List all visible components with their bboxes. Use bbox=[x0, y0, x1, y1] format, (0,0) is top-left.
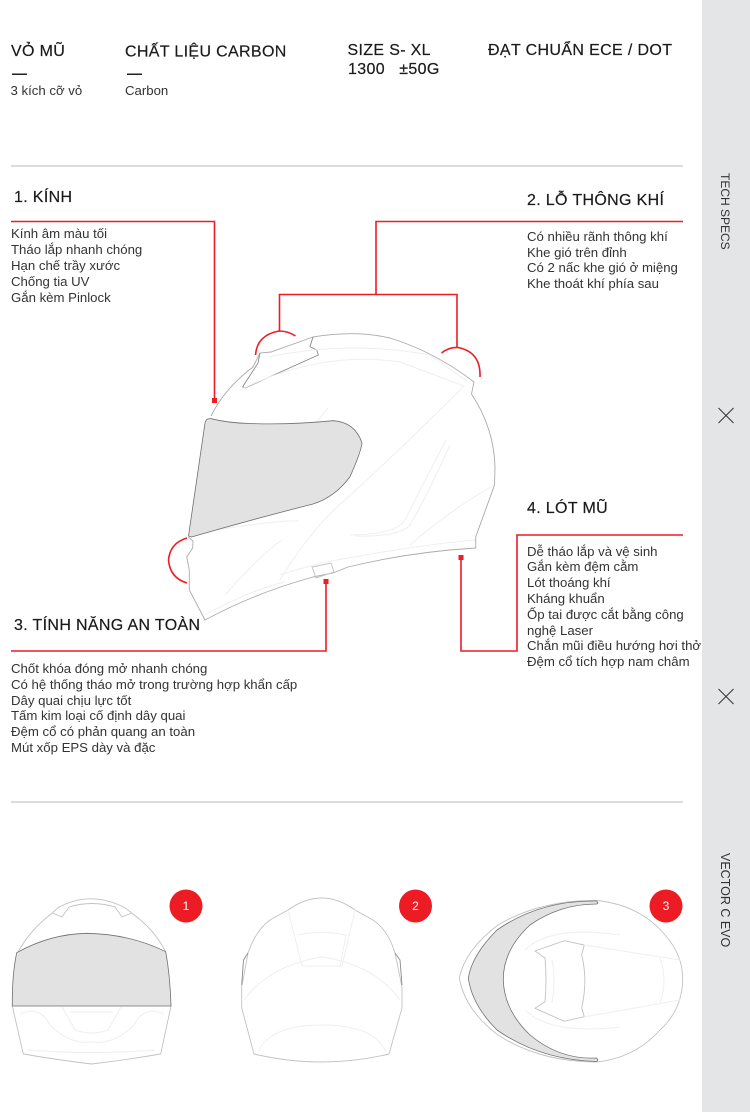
text: safety features: Có hệ thống tháo mở trong trường hợp khẩn cấp bbox=[11, 677, 297, 692]
main helmet side view bbox=[187, 334, 495, 620]
callout 4 line bbox=[458, 535, 683, 651]
text: liner features: Chắn mũi điều hướng hơi thở bbox=[527, 638, 701, 653]
sidebar bbox=[702, 0, 750, 1112]
text: liner features: Đệm cổ tích hợp nam châm bbox=[527, 654, 690, 669]
text: visor features: Chống tia UV bbox=[11, 274, 90, 289]
spec: size and weight: SIZE S- XL bbox=[348, 42, 431, 59]
spec: shell bbox=[10, 40, 82, 98]
icon: close cross lower bbox=[718, 689, 734, 704]
divider bottom bbox=[11, 801, 683, 803]
callout 2 lines bbox=[256, 222, 683, 377]
spec: carbon material bbox=[125, 42, 287, 98]
text: visor features: Kính âm màu tối bbox=[11, 226, 107, 241]
text: vent features: Khe gió trên đỉnh bbox=[527, 245, 627, 260]
helmet front view bbox=[12, 899, 171, 1064]
text: visor features bbox=[11, 226, 142, 305]
heading: 3 safety: 3. TÍNH NĂNG AN TOÀN bbox=[14, 615, 200, 634]
text: liner features: Lót thoáng khí bbox=[527, 575, 611, 590]
callout 3 line bbox=[11, 579, 328, 651]
spec: carbon material: Carbon bbox=[125, 83, 168, 98]
text: vent features: Khe thoát khí phía sau bbox=[527, 276, 659, 291]
top vent bbox=[243, 337, 318, 388]
badge 1: 1 bbox=[183, 899, 190, 913]
badge 2 bbox=[399, 890, 432, 922]
text: safety features: Tấm kim loại cố định dây quai bbox=[11, 708, 186, 723]
top view visor bbox=[468, 901, 598, 1062]
spec: shell: VỎ MŨ bbox=[11, 40, 65, 60]
text: vent features bbox=[527, 229, 678, 291]
heading: 2 vents: 2. LỖ THÔNG KHÍ bbox=[527, 190, 664, 209]
sidebar label: model name: VECTOR C EVO bbox=[718, 853, 732, 948]
visor bbox=[188, 419, 362, 537]
text: safety features: Mút xốp EPS dày và đặc bbox=[11, 740, 156, 755]
spec: shell: 3 kích cỡ vỏ bbox=[10, 83, 82, 98]
spec: carbon material: CHẤT LIỆU CARBON bbox=[125, 42, 287, 60]
spec: certification: ĐẠT CHUẨN ECE / DOT bbox=[488, 40, 672, 59]
helmet outline bbox=[187, 334, 495, 620]
text: liner features: nghệ Laser bbox=[527, 623, 594, 638]
front visor bbox=[12, 933, 171, 1006]
badge 3 bbox=[650, 890, 682, 922]
spec: size and weight bbox=[348, 42, 440, 78]
text: liner features: Dễ tháo lắp và vệ sinh bbox=[527, 544, 658, 559]
text: liner features bbox=[527, 544, 701, 669]
callout 1 line bbox=[11, 222, 217, 403]
helmet rear view bbox=[242, 898, 402, 1062]
text: visor features: Tháo lắp nhanh chóng bbox=[11, 242, 142, 257]
spec: size and weight: 1300 ±50G bbox=[348, 61, 440, 78]
helmet top view bbox=[459, 900, 683, 1062]
badge 1 bbox=[170, 890, 202, 922]
badge 3: 3 bbox=[663, 899, 670, 913]
text: safety features bbox=[11, 661, 297, 755]
heading: 1 visor: 1. KÍNH bbox=[14, 187, 72, 206]
badge 2: 2 bbox=[412, 899, 419, 913]
text: liner features: Kháng khuẩn bbox=[527, 591, 605, 606]
text: visor features: Hạn chế trầy xước bbox=[11, 258, 120, 273]
text: safety features: Dây quai chịu lực tốt bbox=[11, 693, 132, 708]
text: liner features: Gắn kèm đệm cằm bbox=[527, 559, 638, 574]
icon: close cross upper bbox=[718, 408, 734, 423]
divider top bbox=[11, 165, 683, 167]
text: safety features: Chốt khóa đóng mở nhanh chóng bbox=[11, 661, 207, 676]
faint shell lines bbox=[205, 348, 494, 615]
sidebar label: tech specs: TECH SPECS bbox=[718, 173, 732, 250]
text: vent features: Có nhiều rãnh thông khí bbox=[527, 229, 668, 244]
text: vent features: Có 2 nấc khe gió ở miệng bbox=[527, 260, 678, 275]
text: visor features: Gắn kèm Pinlock bbox=[11, 290, 111, 305]
text: safety features: Đệm cổ có phản quang an toàn bbox=[11, 724, 195, 739]
top vent outline bbox=[535, 941, 585, 1021]
heading: 4 liner: 4. LÓT MŨ bbox=[527, 497, 608, 517]
text: liner features: Ốp tai được cắt bằng công bbox=[527, 607, 684, 622]
callout 3 arc bbox=[168, 538, 187, 583]
buckle bbox=[312, 563, 334, 578]
